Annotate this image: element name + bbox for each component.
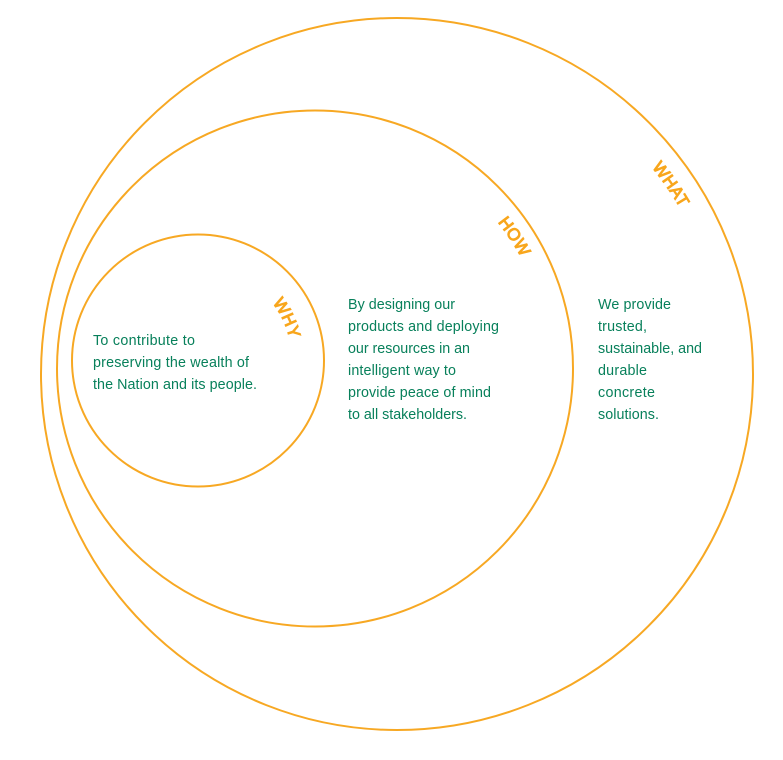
label: why: WHY xyxy=(274,295,302,336)
text block: how xyxy=(348,297,499,423)
text block: what: durable xyxy=(598,363,647,379)
label: what: WHAT xyxy=(653,159,690,205)
label: how: HOW xyxy=(498,216,532,255)
text block: how: intelligent way to xyxy=(348,363,456,379)
text block: what xyxy=(598,297,702,423)
text block: what: trusted, xyxy=(598,319,647,335)
text block: what: solutions. xyxy=(598,407,659,423)
text block: why: To contribute to xyxy=(93,333,195,349)
text block: what: sustainable, and xyxy=(598,341,702,357)
text block: how: to all stakeholders. xyxy=(348,407,467,423)
text block: what: We provide xyxy=(598,297,671,313)
text block: why xyxy=(93,333,257,393)
text block: why: preserving the wealth of xyxy=(93,355,249,371)
text block: how: products and deploying xyxy=(348,319,499,335)
text block: what: concrete xyxy=(598,385,655,401)
text block: how: our resources in an xyxy=(348,341,470,357)
text block: why: the Nation and its people. xyxy=(93,377,257,393)
text block: how: By designing our xyxy=(348,297,455,313)
text block: how: provide peace of mind xyxy=(348,385,491,401)
circle: why xyxy=(72,234,324,486)
circle: how xyxy=(57,110,573,626)
